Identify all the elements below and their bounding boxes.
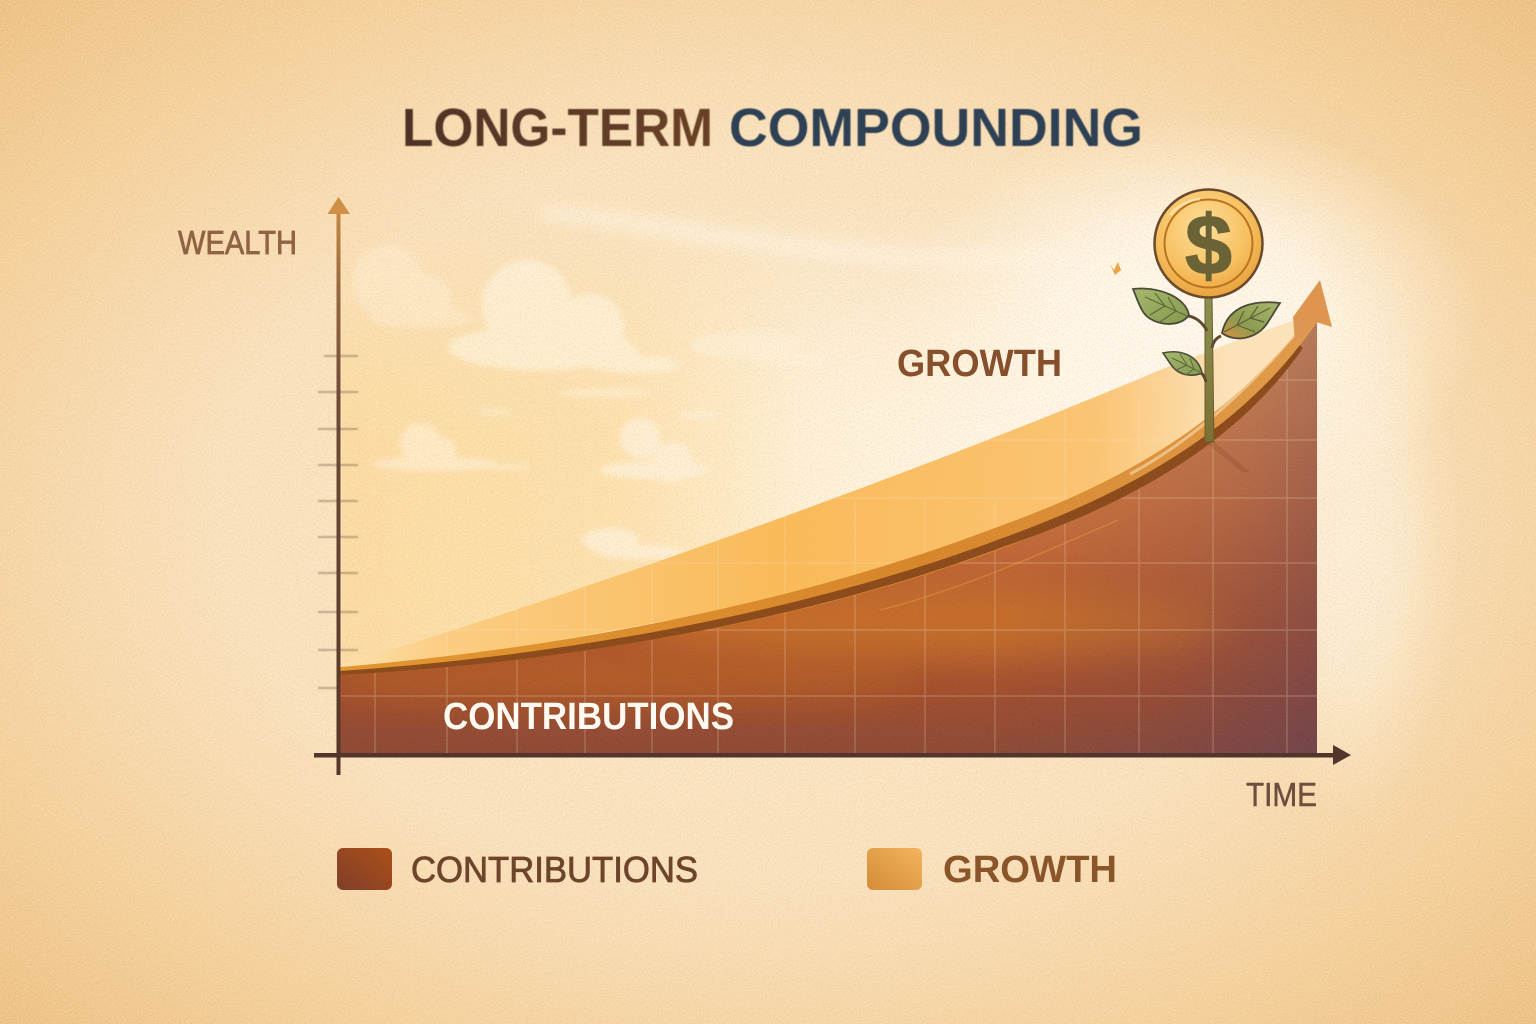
left leaf: [1133, 289, 1189, 324]
growth label: GROWTH: [897, 343, 1062, 385]
legend: growth: GROWTH: [943, 849, 1117, 891]
y axis label: WEALTH: [178, 224, 297, 261]
ticks on wealth axis: [318, 356, 358, 688]
area chart: [320, 280, 1332, 760]
coin: $: [1185, 198, 1232, 292]
stem: [1205, 296, 1214, 442]
right leaf: [1222, 302, 1280, 338]
contributions label: CONTRIBUTIONS: [443, 696, 734, 738]
legend: growth: [867, 848, 1117, 891]
growth curve band: [340, 316, 1317, 675]
wispy high clouds: [540, 205, 1080, 268]
plant shadow: [1205, 440, 1250, 472]
x axis label: TIME: [1246, 776, 1317, 813]
coin: [1154, 190, 1262, 298]
legend: contributions: CONTRIBUTIONS: [411, 849, 698, 890]
title: [402, 98, 1143, 158]
icon: money plant: [1133, 190, 1280, 472]
title: COMPOUNDING: [729, 98, 1143, 158]
background glow right of chart: [1240, 260, 1460, 820]
branches: [1188, 316, 1221, 382]
clouds: [352, 246, 896, 559]
contributions area: [320, 322, 1317, 755]
title: LONG-TERM: [402, 98, 713, 158]
legend: [337, 848, 1117, 891]
curve arrowhead: [1293, 280, 1332, 343]
y axis with arrow: [328, 197, 350, 775]
x axis with arrow: [314, 745, 1351, 765]
chart grain: [340, 300, 1320, 760]
icon: butterfly: [1110, 262, 1121, 275]
sky panel: [342, 260, 1109, 664]
lower leaf: [1163, 352, 1202, 375]
growth area: [340, 320, 1295, 680]
background glow behind plant: [900, 115, 1480, 525]
